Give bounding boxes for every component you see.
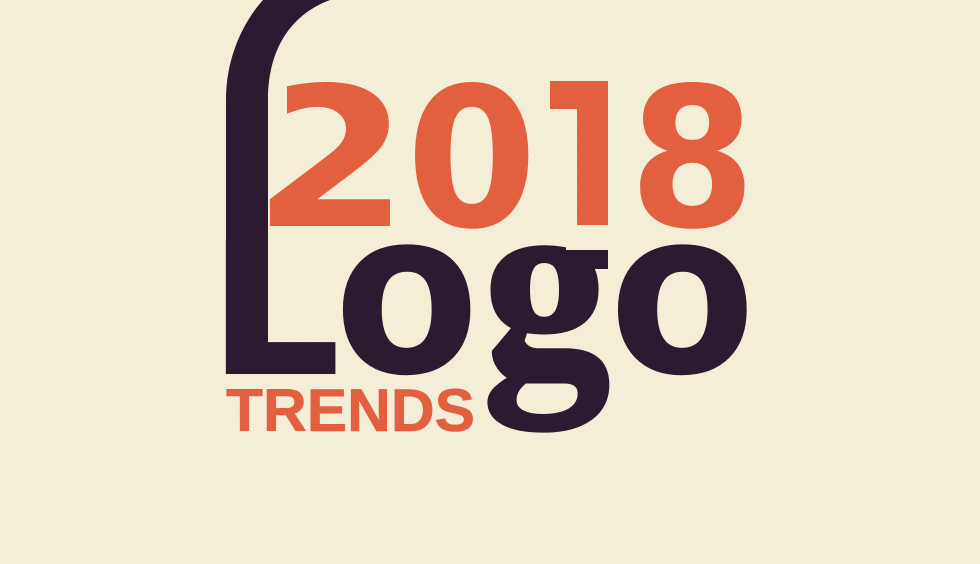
heading: 2018: 8 <box>629 47 756 272</box>
heading: Logo: o <box>612 164 753 419</box>
heading: Logo: o <box>337 165 476 419</box>
heading: Logo: L <box>220 207 335 406</box>
subheading: TRENDS: TRENDS <box>226 377 475 444</box>
heading: Logo: g <box>483 137 610 434</box>
icon: arch forming the top of the L <box>226 0 330 345</box>
heading: 2018: 1 <box>524 46 652 272</box>
heading: 2018 <box>270 81 744 229</box>
heading: 2018: 0 <box>406 47 537 273</box>
heading: Logo <box>226 240 747 433</box>
heading: 2018: 2 <box>252 46 410 272</box>
